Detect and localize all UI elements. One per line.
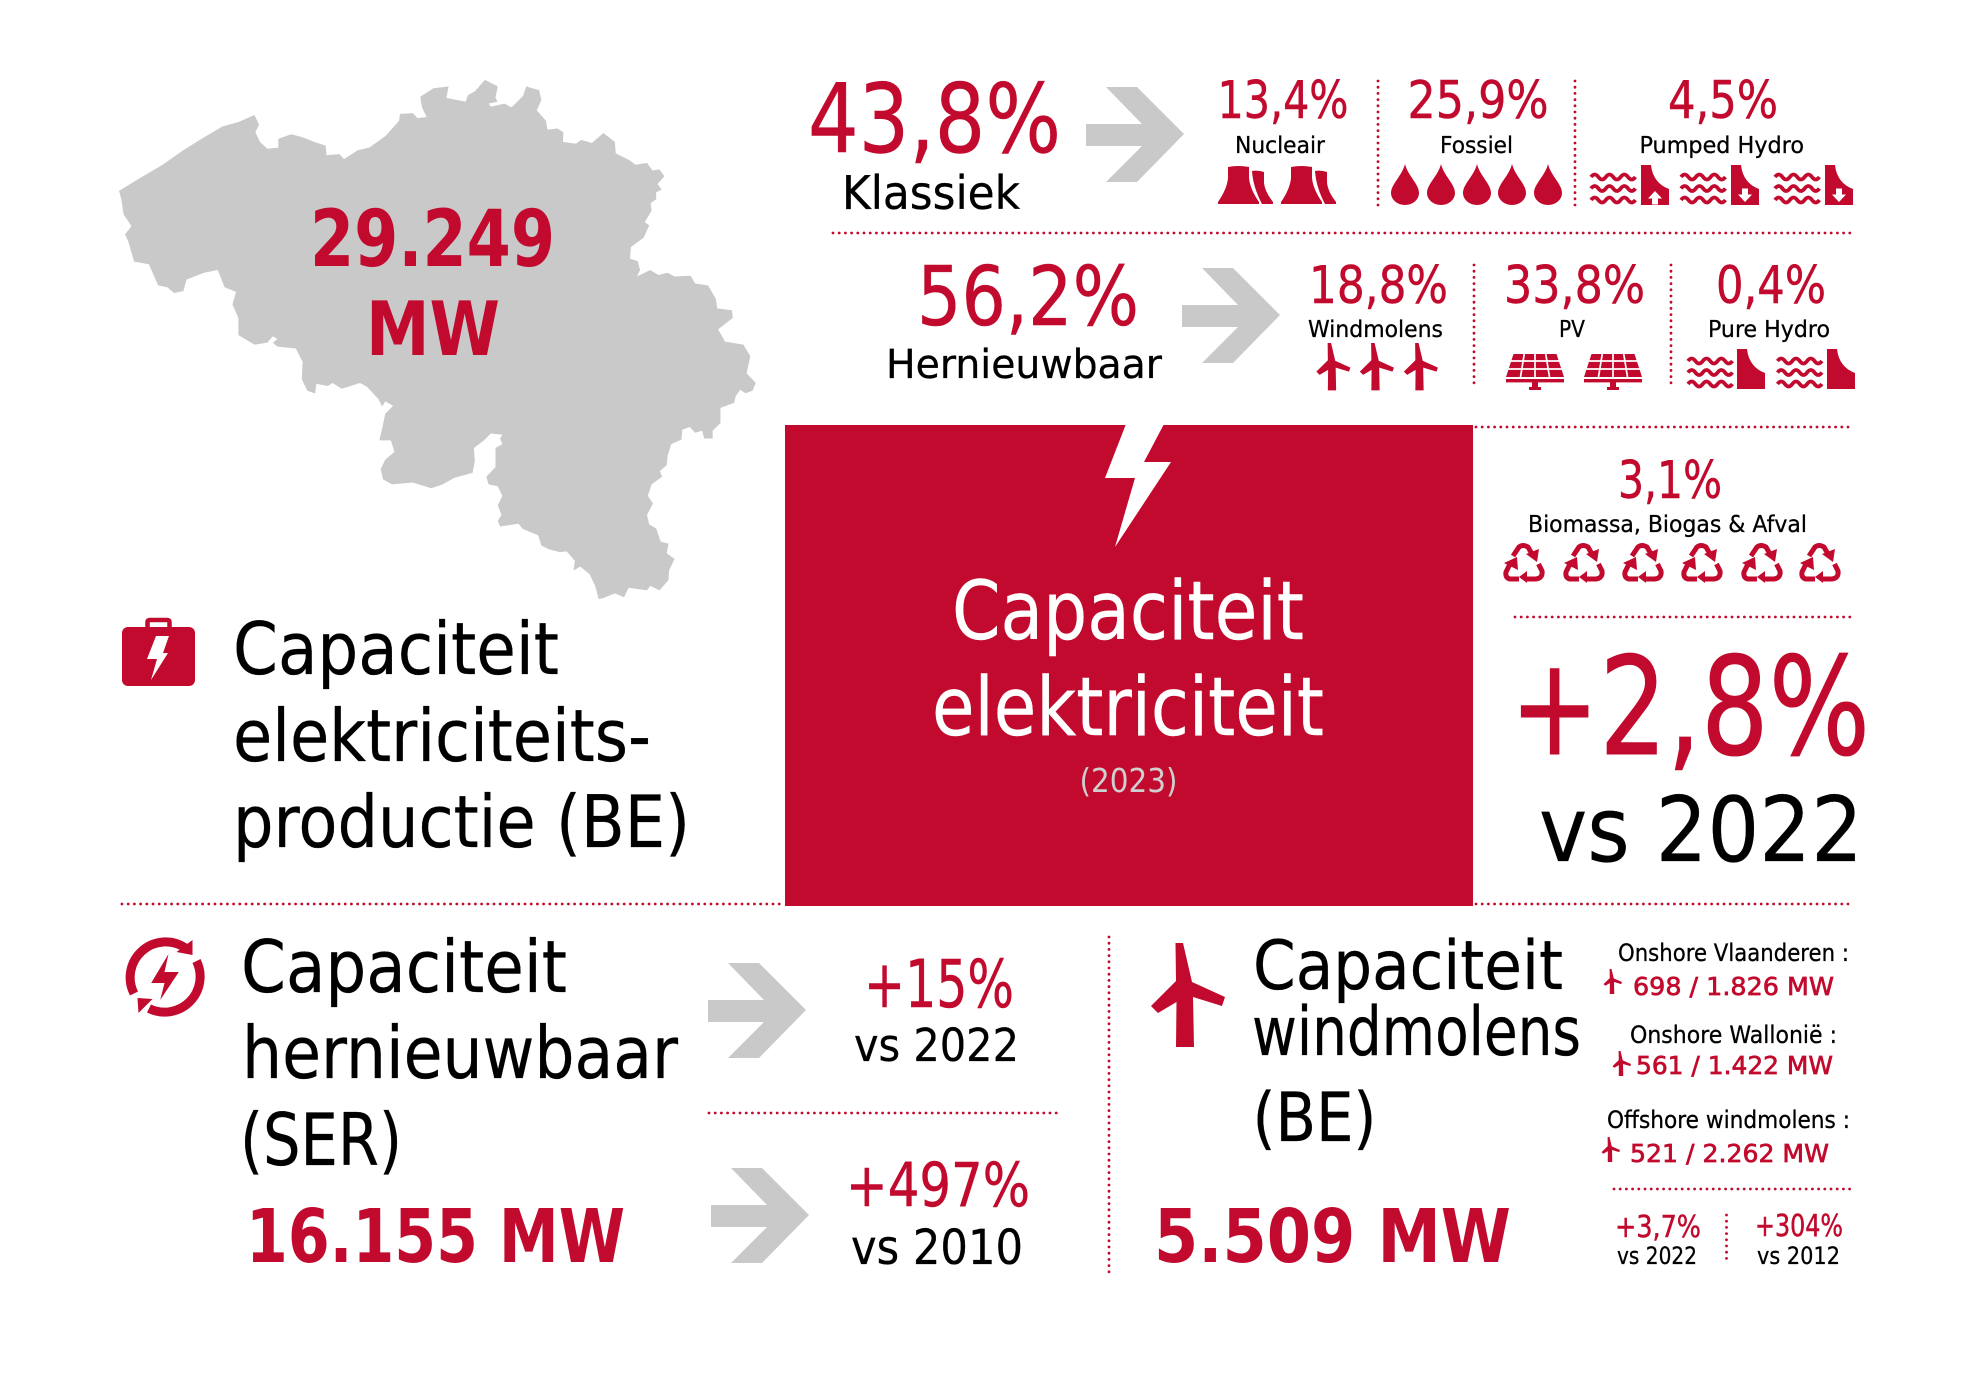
panel: capaciteit hernieuwbaar: [130, 925, 1030, 1280]
heading line 1: Capaciteit: [241, 925, 567, 1009]
icon: briefcase with bolt: [122, 620, 195, 686]
icon: pumped hydro dams: [1591, 165, 1853, 205]
onshore flanders label: Onshore Vlaanderen :: [1618, 939, 1849, 967]
heading: elektriciteits-: [233, 694, 651, 778]
pure hydro label: Pure Hydro: [1708, 317, 1830, 343]
icon: small turbine: [1602, 1137, 1620, 1162]
biomassa label: Biomassa, Biogas & Afval: [1528, 512, 1807, 538]
windmolens label: Windmolens: [1308, 317, 1443, 343]
hernieuwbaar label: Hernieuwbaar: [886, 342, 1163, 388]
pure hydro share: 0,4%: [1716, 256, 1826, 316]
red background: [785, 425, 1473, 906]
heading line 1: Capaciteit: [1253, 927, 1563, 1006]
total capacity value: 29.249: [310, 195, 555, 285]
biomassa share: 3,1%: [1618, 451, 1722, 511]
klassiek label: Klassiek: [842, 166, 1020, 220]
icon: wind turbines: [1316, 343, 1438, 390]
heading: productie (BE): [233, 780, 690, 864]
icon: solar panels: [1506, 354, 1642, 390]
arrow: hernieuwbaar: [1182, 268, 1280, 363]
growth versus 2012: +304%: [1755, 1209, 1843, 1244]
arrow: versus 2010: [711, 1168, 809, 1263]
comparison 2022: vs 2022: [854, 1019, 1019, 1072]
icon: renewable cycle with bolt: [130, 940, 200, 1013]
growth comparison: vs 2022: [1539, 778, 1863, 883]
nucleair label: Nucleair: [1235, 133, 1326, 159]
renewable capacity value: 16.155 MW: [246, 1194, 625, 1280]
panel: capaciteit elektriciteitsproductie: [122, 607, 690, 864]
panel: klassiek: [808, 65, 1853, 220]
panel: hernieuwbaar: [886, 250, 1855, 390]
icon: cooling towers: [1218, 166, 1336, 204]
klassiek share: 43,8%: [808, 65, 1061, 175]
map of Belgium with total capacity: [119, 80, 756, 599]
icon: small turbine: [1604, 969, 1622, 994]
icon: small turbine: [1612, 1051, 1631, 1076]
heading line 2: elektriciteit: [932, 661, 1324, 755]
onshore flanders value: 698 / 1.826 MW: [1633, 972, 1834, 1001]
icon: oil drops: [1391, 164, 1562, 205]
panel: central red block: [785, 424, 1473, 906]
windmolens share: 18,8%: [1309, 256, 1448, 316]
heading line 2: windmolens: [1252, 993, 1581, 1072]
fossiel label: Fossiel: [1440, 133, 1513, 159]
arrow: versus 2022: [708, 963, 806, 1058]
offshore value: 521 / 2.262 MW: [1630, 1139, 1829, 1168]
fossiel share: 25,9%: [1408, 71, 1548, 131]
heading line 3: (SER): [240, 1098, 402, 1182]
heading line 3: (BE): [1252, 1079, 1376, 1158]
icon: pure hydro dams: [1688, 349, 1855, 389]
icon: recycle symbols: [1504, 546, 1838, 583]
growth versus 2010: +497%: [846, 1150, 1030, 1221]
panel: biomassa and growth: [1504, 451, 1870, 883]
map: Belgium silhouette: [119, 80, 756, 599]
growth versus 2022: +3,7%: [1615, 1210, 1701, 1245]
onshore wallonia label: Onshore Wallonië :: [1630, 1021, 1837, 1049]
pumped hydro share: 4,5%: [1668, 71, 1778, 131]
pumped hydro label: Pumped Hydro: [1640, 133, 1804, 159]
comparison 2022: vs 2022: [1617, 1242, 1697, 1270]
arrow: klassiek: [1086, 87, 1184, 182]
nucleair share: 13,4%: [1218, 71, 1348, 131]
year: (2023): [1080, 761, 1178, 800]
total capacity unit: MW: [366, 285, 500, 373]
heading line 1: Capaciteit: [952, 565, 1304, 659]
offshore label: Offshore windmolens :: [1607, 1106, 1850, 1134]
heading: Capaciteit: [233, 607, 559, 691]
pv label: PV: [1559, 317, 1585, 343]
comparison 2010: vs 2010: [851, 1220, 1023, 1276]
comparison 2012: vs 2012: [1757, 1242, 1840, 1270]
pv share: 33,8%: [1504, 256, 1645, 316]
wind capacity value: 5.509 MW: [1154, 1194, 1511, 1280]
onshore wallonia value: 561 / 1.422 MW: [1636, 1051, 1833, 1080]
growth versus 2022: +15%: [864, 946, 1014, 1023]
icon: large wind turbine: [1151, 943, 1225, 1047]
heading line 2: hernieuwbaar: [242, 1011, 678, 1095]
icon: lightning bolt: [1105, 424, 1171, 547]
hernieuwbaar share: 56,2%: [917, 250, 1139, 345]
growth percentage: +2,8%: [1510, 629, 1870, 787]
panel: capaciteit windmolens: [1151, 927, 1850, 1280]
